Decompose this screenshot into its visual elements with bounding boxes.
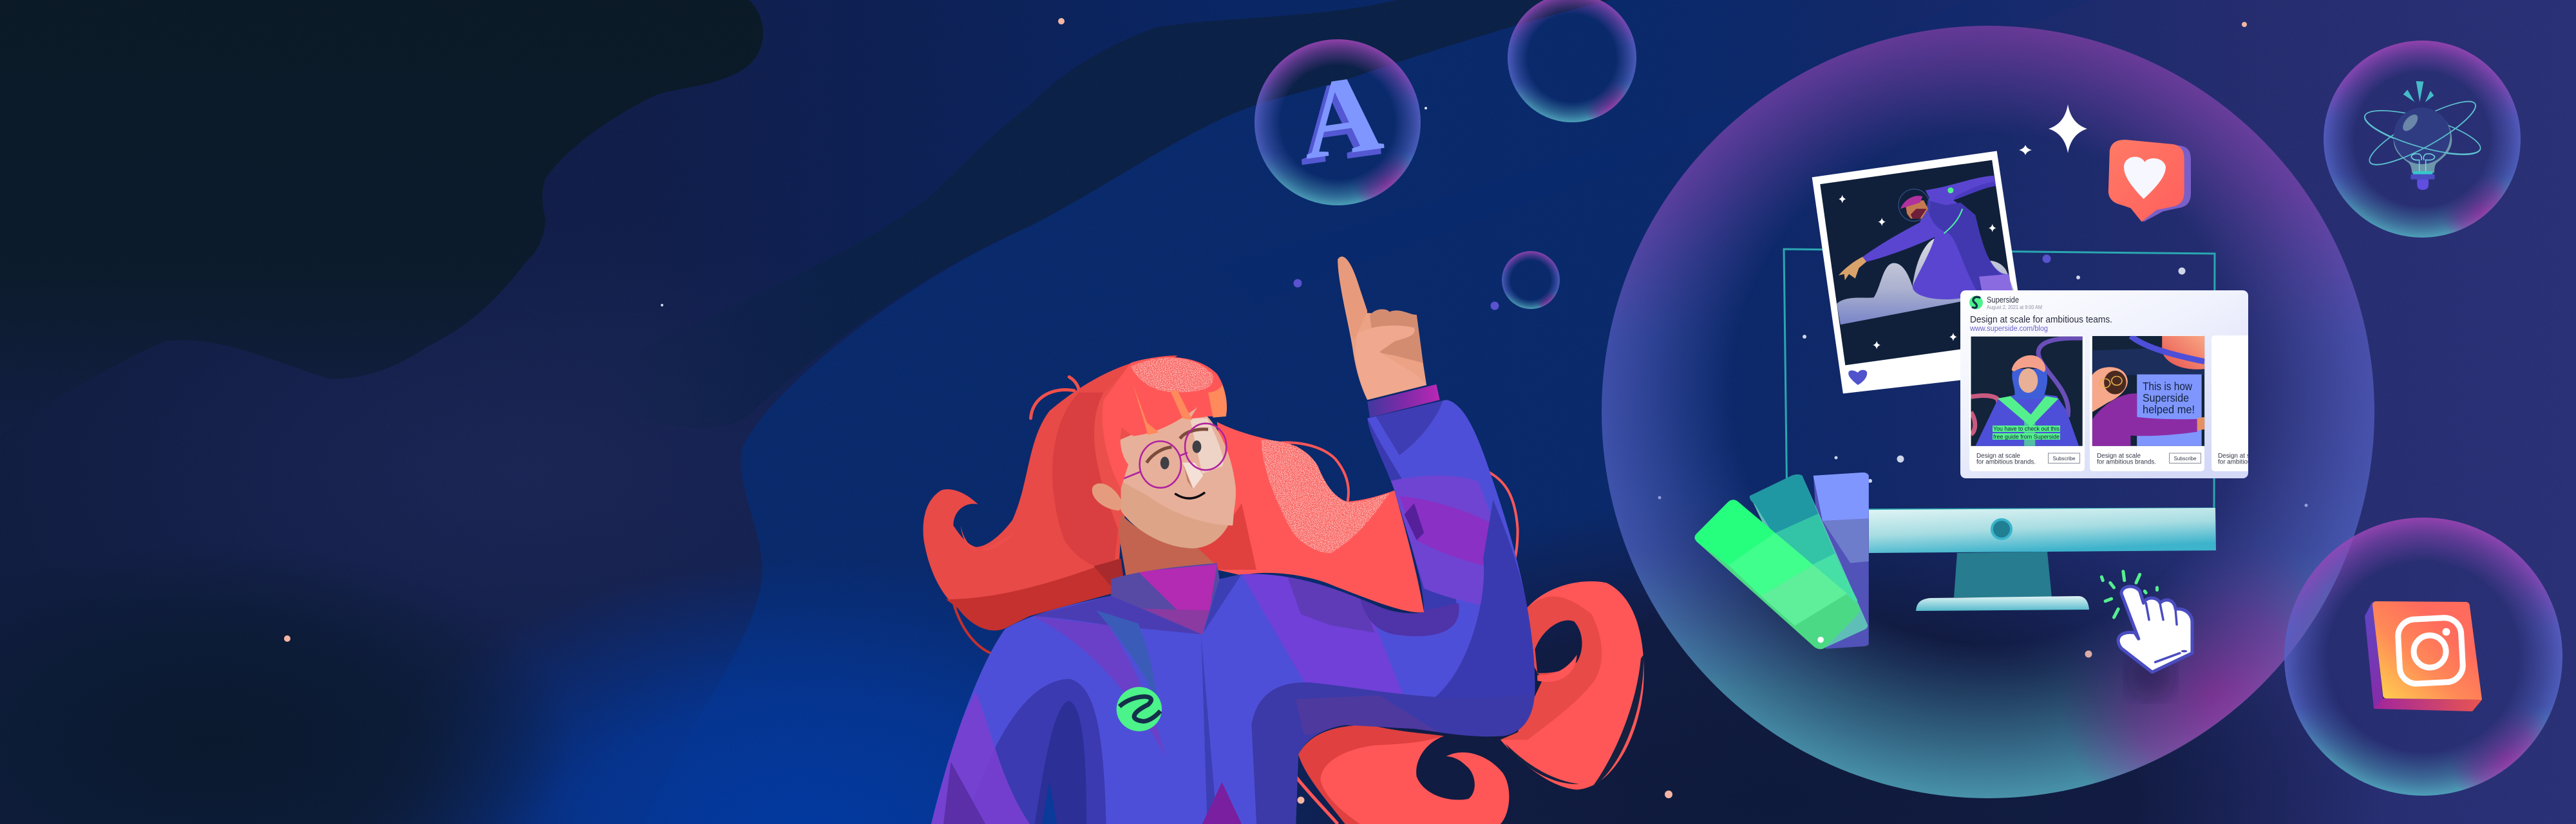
- card 1 green caption: [1993, 426, 2060, 440]
- eyebrows and eyes: [1146, 429, 1208, 469]
- icon: 3D letter A: A: [1298, 50, 1387, 183]
- card 2 footer: Design at scale: [2097, 453, 2141, 460]
- bubble: letter A: [1255, 39, 1421, 205]
- hair: lower left strand: [953, 603, 993, 654]
- card header text: www.superside.com/blog: [1969, 325, 2048, 333]
- photo sparkles: [1839, 195, 1996, 350]
- social post card: [1960, 290, 2277, 478]
- card logo: [1969, 296, 1983, 309]
- icon: clicking hand cursor: [2101, 572, 2192, 672]
- jacket: center seam and opening: [1201, 636, 1242, 824]
- monitor: [1784, 249, 2216, 611]
- carousel card 1: [1969, 335, 2085, 471]
- icon: 3D letter A: A: [1293, 55, 1383, 189]
- stars and dots: [284, 18, 2308, 803]
- hair: fringe and crown: [1103, 357, 1227, 489]
- swatch: teal: [1750, 474, 1868, 649]
- jacket: chest folds: [1242, 573, 1535, 824]
- card header text: August 2, 2021 at 9:00 AM: [1987, 304, 2042, 310]
- carousel card 3 clipped: Design at scale: [2218, 453, 2262, 460]
- hand pointing up: [1338, 257, 1426, 400]
- card 2 blue panel text: helped me!: [2143, 403, 2195, 416]
- carousel card 2: [2090, 335, 2204, 471]
- icon: Instagram 3D block: [2365, 601, 2482, 711]
- hair: left mass shading: [946, 366, 1133, 630]
- ear: [1092, 483, 1128, 510]
- click sparks: [2101, 572, 2157, 617]
- hair: right lower loop shading: [1501, 596, 1602, 740]
- jacket: sleeve folds: [1367, 398, 1535, 705]
- monitor stand: [1954, 552, 2052, 597]
- card 2 illustration: [2092, 336, 2204, 446]
- jacket: collar and shoulder: [1032, 563, 1242, 756]
- face: [1119, 407, 1236, 548]
- hair: speckled crown: [1131, 358, 1213, 393]
- card 2 footer: [2097, 453, 2201, 466]
- bubble: Instagram: [2284, 518, 2562, 796]
- card 2 blue panel text: [2143, 380, 2195, 416]
- bubble: light bulb: [2324, 41, 2521, 238]
- color swatches fan: [1695, 473, 1869, 649]
- swatch: blue: [1814, 473, 1869, 649]
- card 2 footer: for ambitious brands.: [2097, 458, 2156, 466]
- icon: large sparkle: [2049, 104, 2087, 153]
- hair: bottom loop shading: [1298, 725, 1444, 824]
- character: woman with red hair pointing up: [902, 257, 1644, 824]
- carousel card 3 clipped: [2211, 335, 2277, 471]
- card 2 footer: Subscribe: [2174, 456, 2197, 462]
- monitor chin: [1869, 508, 2216, 553]
- card 2 blue panel text: Superside: [2143, 391, 2189, 404]
- cursor hand shadow: [2128, 653, 2174, 699]
- hair: right flowing mass: [1197, 422, 1424, 612]
- card 1 footer: Design at scale: [1976, 453, 2020, 460]
- card 1 footer: for ambitious brands.: [1976, 458, 2036, 466]
- icon: atom light bulb: [2361, 81, 2485, 190]
- card 1 footer: [1976, 453, 2080, 466]
- astronaut figure: [1839, 176, 2012, 299]
- card 2 blue panel text: This is how: [2143, 380, 2192, 393]
- glasses: [1121, 424, 1226, 488]
- hair: bottom loop: [1298, 725, 1509, 824]
- card header text: [1969, 295, 2112, 333]
- hair: right lower loop: [1501, 581, 1644, 790]
- card header text: Design at scale for ambitious teams.: [1970, 315, 2112, 325]
- icon: small sparkle: [2019, 145, 2032, 155]
- hair: left mass: [923, 355, 1178, 630]
- hair: top curls: [1031, 377, 1079, 418]
- neck: [1119, 514, 1217, 576]
- bubble: empty top: [1508, 0, 1636, 122]
- card 1 illustration: [1971, 337, 2083, 446]
- bubble: empty small: [1502, 251, 1560, 309]
- carousel card 3 clipped: for ambitious brands.: [2218, 458, 2277, 466]
- monitor screen frame: [1784, 249, 2215, 510]
- icon: photo heart: [1848, 370, 1867, 385]
- card 1 green caption: free guide from Superside: [1993, 434, 2060, 440]
- card 1 green caption: You have to check out this: [1993, 426, 2060, 432]
- hair: orange highlights: [1133, 383, 1227, 435]
- hair: speckled highlight: [1262, 440, 1390, 553]
- large bubble: [1602, 26, 2374, 798]
- icon: green badge: [1117, 687, 1162, 731]
- monitor base: [1916, 596, 2089, 611]
- polaroid photo: [1812, 151, 2030, 393]
- photo clouds: [1837, 237, 2014, 324]
- swatch: green: [1695, 500, 1859, 649]
- logo glyph: [2397, 617, 2464, 684]
- mouth: [1176, 493, 1204, 498]
- card header text: Superside: [1987, 295, 2019, 304]
- sleeve cuff: [1367, 384, 1440, 418]
- jacket: silhouette: [931, 400, 1535, 824]
- card 1 footer: Subscribe: [2053, 456, 2076, 462]
- jacket: left sleeve folds: [931, 679, 1106, 824]
- hair: thin strand right: [1271, 442, 1349, 501]
- icon: notification heart bubble: [2108, 140, 2191, 222]
- monitor camera: [1992, 520, 2011, 539]
